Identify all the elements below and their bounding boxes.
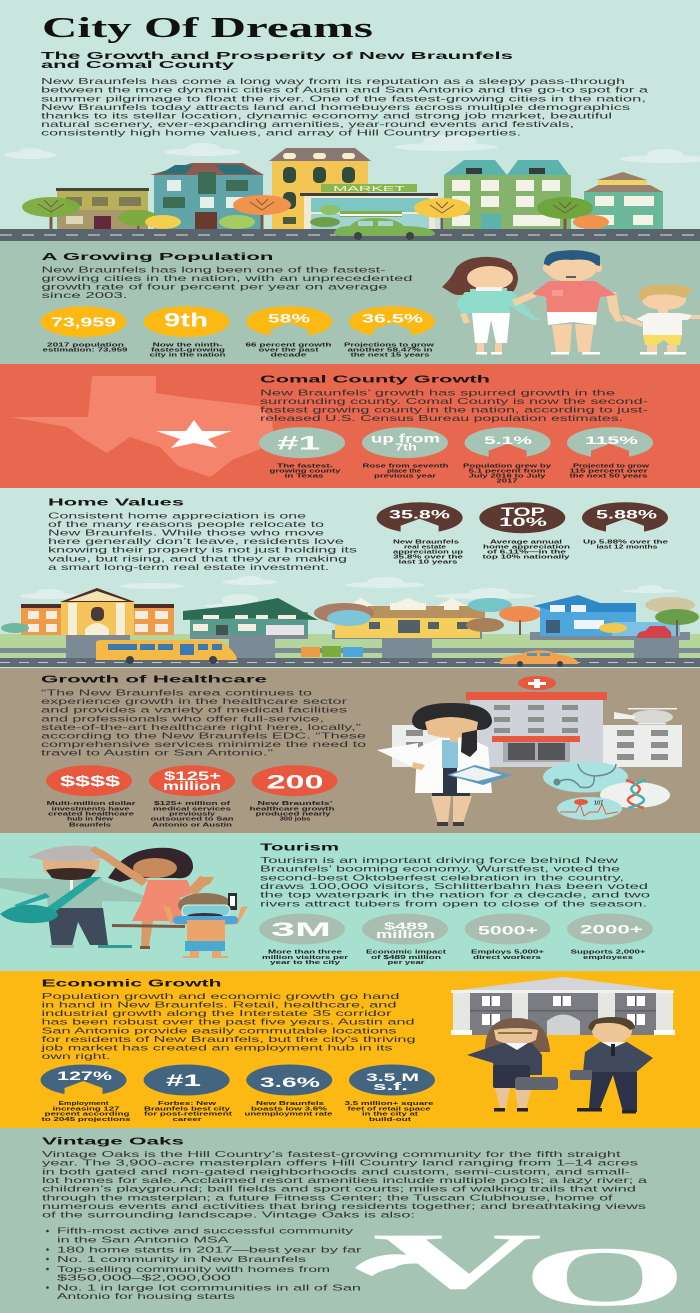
body text: “The New Braunfels area continues to [41, 688, 313, 698]
stat: 58% [246, 306, 332, 359]
body text: growing cities in the nation, with an unprecedented [42, 273, 413, 283]
stat: #1: growing county [270, 469, 341, 475]
body text: through the masterplan; a future Fitness Center; the Tuscan Clubhouse, home of [42, 1192, 614, 1202]
panel: home values [0, 488, 700, 668]
stat: 3.5 M s.f.: build-out [369, 1117, 412, 1123]
bullet list: Top-selling community with homes from [57, 1264, 330, 1274]
stat: 115%: 115 percent over [570, 469, 648, 475]
body text: Tourism is an important driving force behind New [260, 855, 620, 865]
stat: $125+ million: $125+ million of [154, 801, 231, 807]
logo: VO [355, 1217, 687, 1313]
stat: $489 million: of $489 million [371, 955, 441, 961]
stat: 73,959: 2017 population [47, 343, 124, 349]
body text: children’s playground; ball fields and sport courts; miles of walking trails that wind [42, 1184, 637, 1194]
stat: $489 million: Economic impact [366, 950, 447, 956]
stat: 5.1%: 5.1% [484, 435, 532, 447]
stat: 36.5%: 36.5% [362, 312, 424, 326]
body text: in both gated and non-gated neighborhoods and custom, semi-custom, and small- [42, 1166, 630, 1176]
body text: Vintage Oaks is the Hill Country’s fastest-growing community for the fifth straight [42, 1149, 622, 1159]
heading: Economic Growth [42, 978, 222, 990]
intro text block: between the more dynamic cities of Austin and San Antonio and the go-to spot for a [41, 85, 649, 95]
body text: value, but rising, and that they are making [48, 553, 347, 563]
stat: 9th: 9th [164, 310, 208, 332]
stat: $125+ million: previously [169, 811, 215, 817]
stat: up from 7th: previous year [374, 474, 436, 480]
illustration: family [442, 250, 700, 354]
logo: VO: V [372, 1217, 542, 1306]
stat: 5.1%: 5.1 percent from [468, 469, 546, 475]
bullet list: No. 1 community in New Braunfels [57, 1254, 306, 1264]
body text: in hand in New Braunfels. Retail, healthcare, and [42, 999, 397, 1009]
stat: $$$$: Braunfels [69, 822, 111, 828]
stat: top 10%: TOP [501, 507, 546, 519]
icon: star [156, 420, 232, 448]
building: hospital [392, 676, 682, 767]
body text: comprehensive services minimize the need to [41, 739, 367, 749]
body text: a smart long-term real estate investment. [48, 562, 329, 572]
stat: 73,959: 73,959 [51, 314, 116, 330]
body text: San Antonio provide easily commutable locations [42, 1025, 396, 1035]
stat: 3.5 M s.f.: feet of retail space [348, 1106, 431, 1112]
body text: growth rate of four percent per year on average [42, 282, 388, 292]
heading: Growth of Healthcare [41, 674, 268, 686]
clouds [5, 135, 700, 163]
stat: 127%: 127% [57, 1069, 113, 1083]
intro text block: New Braunfels has come a long way from its reputation as a sleepy pass-through [41, 76, 626, 86]
figure: child with goggles [163, 893, 248, 958]
intro text block: thanks to its stellar location, dynamic economy and strong job market, beautiful [41, 110, 612, 120]
body text: New Braunfels has long been one of the fastest- [42, 264, 386, 274]
stat: 36.5%: another 58.47% in [348, 348, 432, 354]
building: market [300, 184, 438, 230]
stat: 35.8%: 35.8% [389, 508, 451, 522]
figure: doctor [377, 703, 512, 826]
grass and side street [0, 630, 700, 658]
stat: $125+ million: outsourced to San [150, 817, 234, 823]
body text [42, 1149, 648, 1220]
stat: $489 million: $489 [384, 920, 428, 932]
stat: top 10%: home appreciation [483, 544, 570, 550]
stat: 3.5 M s.f. [344, 1064, 435, 1123]
bullet list: in the San Antonio MSA [57, 1234, 229, 1244]
heading: A Growing Population [42, 252, 274, 263]
stat: 115%: the next 50 years [570, 474, 648, 480]
stat: top 10%: Average annual [490, 539, 563, 545]
stat: 36.5% [344, 306, 436, 359]
body text: second-best Oktoberfest celebration in the country, [260, 872, 624, 882]
stat: 35.8%: real estate [404, 544, 446, 550]
stat: 58%: over the past [258, 348, 319, 354]
bullet list: Antonio for housing starts [57, 1291, 235, 1301]
illustration: town street with market [0, 148, 700, 241]
house: orange school [1, 588, 174, 635]
stat: 5000+: direct workers [473, 955, 541, 961]
body text: experience growth in the healthcare sector [41, 696, 347, 706]
stat: #1: The fastest- [277, 464, 334, 470]
stat: #1: in Texas [284, 474, 324, 480]
stat: top 10%: 10% [499, 517, 547, 529]
stat: #1 Forbes: #1 [166, 1071, 201, 1090]
heading: Vintage Oaks [42, 1136, 185, 1148]
stat: 35.8%: New Braunfels [393, 539, 459, 545]
vehicle: orange car [500, 650, 578, 667]
house: blue [533, 595, 699, 638]
intro text block: summer pilgrimage to float the river. One of the fastest-growing cities in the nation, [41, 93, 646, 103]
stat: 115%: 115% [585, 435, 638, 447]
stat: 35.8% [377, 502, 463, 566]
subtitle: The Growth and Prosperity of New Braunfels [41, 51, 514, 62]
stat: up from 7th [362, 427, 448, 480]
illustration: hospital and doctor [377, 676, 682, 826]
stat: 3M: million visitors per [262, 955, 348, 961]
stat: $$$$: Multi-million dollar [46, 801, 136, 807]
stat: 127%: percent according [44, 1112, 130, 1118]
body text: released U.S. Census Bureau population estimates. [260, 413, 623, 423]
stat: 3.5 M s.f.: 3.5 M [366, 1072, 419, 1084]
bullet list: No. 1 in large lot communities in all of San [57, 1282, 362, 1292]
figure: child [622, 285, 700, 354]
building: columned office [451, 977, 675, 1035]
stat: 3.6%: 3.6% [260, 1074, 321, 1090]
building: olive shop [56, 188, 149, 230]
stat: 3M: 3M [271, 920, 331, 941]
heading: Tourism [260, 842, 339, 854]
title: City Of Dreams [42, 12, 373, 44]
body text: of the surrounding landscape. Vintage Oaks is also: [42, 1210, 415, 1220]
stat: 127%: Employment [58, 1101, 109, 1107]
stat: 5.88%: Up 5.88% over the [583, 539, 668, 545]
heading: Home Values [48, 498, 185, 508]
stat: 200: healthcare growth [250, 806, 334, 812]
vehicle: school bus [96, 640, 237, 664]
figure: woman [442, 257, 540, 354]
stat: 9th: city in the nation [150, 353, 226, 359]
panel: intro header and town street [0, 0, 700, 241]
body text: fastest growing county in the nation, according to just- [260, 405, 648, 415]
stat: top 10%: of 6.11%—in the [487, 549, 566, 555]
stat: 3.6%: unemployment rate [244, 1112, 333, 1118]
body text: rivers attract tubers from open to close of the season. [260, 898, 647, 908]
body text [41, 688, 367, 757]
stat: 5000+: Employs 5,000+ [471, 950, 544, 956]
stat: 3.6% [244, 1064, 333, 1118]
body text: job market has created an employment hub in its [40, 1043, 393, 1053]
icon: heart rate circle [557, 797, 622, 820]
stat: 58%: decade [270, 353, 307, 359]
stat: top 10%: top 10% nationally [482, 554, 570, 560]
intro text block: natural scenery, ever-expanding amenities, year-round events and festivals, [41, 119, 574, 129]
intro text block: New Braunfels today attracts land and homebuyers across multiple demographics [41, 102, 630, 112]
stat: $489 million: per year [388, 960, 424, 966]
body text [48, 510, 357, 572]
figure: man [512, 250, 624, 354]
icon: stethoscope circle [543, 762, 628, 792]
stat: $489 million: million [376, 929, 435, 941]
stat: 115% [567, 427, 653, 480]
stat: 35.8%: appreciation up [393, 549, 463, 555]
stat: #1 Forbes [144, 1064, 233, 1123]
body text: surrounding county. Comal County is now the second- [260, 396, 648, 406]
body text: since 2003. [42, 290, 128, 300]
stat: 3.6%: boasts low 3.6% [251, 1106, 328, 1112]
icon: helicopter [614, 708, 677, 724]
subtitle: and Comal County [41, 60, 235, 71]
road [0, 229, 700, 241]
stat: $$$$ [46, 765, 136, 828]
stat: 9th [144, 306, 230, 359]
stat: up from 7th: up from [371, 432, 440, 446]
stat: 3.5 M s.f.: s.f. [373, 1081, 408, 1093]
icon: dna circle [600, 780, 670, 808]
panel: a growing population [0, 241, 700, 364]
stat: 5.88%: 5.88% [596, 508, 658, 522]
body text [260, 388, 648, 423]
stat: 127%: increasing 127 [52, 1106, 120, 1112]
stat: #1 Forbes: for post-retirement [144, 1112, 233, 1118]
stat: 9th: Now the ninth- [152, 343, 223, 349]
house: green [183, 598, 318, 635]
stat: 3M: More than three [268, 950, 342, 956]
car: green [334, 218, 435, 240]
stat: $125+ million: $125+ [164, 771, 221, 783]
body text: has been robust over the past five years. Austin and [42, 1017, 415, 1027]
body text: New Braunfels. While those who move [48, 528, 325, 538]
stat: $125+ million [149, 765, 235, 828]
stat: 200: produced nearly [256, 811, 331, 817]
stat: 3.5 M s.f.: in the city at [362, 1112, 418, 1118]
stat: top 10% [479, 502, 570, 560]
stat: 73,959: estimation: 73,959 [42, 348, 128, 354]
subtitle [41, 51, 514, 71]
stat: 5.1%: 2017 [496, 479, 518, 485]
stat: 2000+: 2000+ [580, 922, 643, 936]
body text [40, 991, 416, 1061]
bullet list [46, 1226, 362, 1301]
stat: 2000+: Supports 2,000+ [570, 950, 646, 956]
figure: woman [90, 846, 214, 949]
illustration: tourist family [0, 846, 248, 958]
illustration: neighborhood street [0, 576, 700, 667]
body text: own right. [42, 1051, 110, 1061]
stat: 5.1%: Population grew by [463, 464, 551, 470]
stat: 200: New Braunfels’ [258, 801, 334, 807]
bullet list: $350,000–$2,000,000 [57, 1273, 232, 1283]
stat: $489 million [362, 914, 448, 966]
intro text block [41, 76, 649, 138]
body text: and professionals who offer full-service, [41, 713, 324, 723]
body text: and provides a variety of medical facilities [41, 705, 347, 715]
stat: $125+ million: medical services [153, 806, 231, 812]
stat: $$$$: investments have [52, 806, 130, 812]
stat: 3.5 M s.f.: 3.5 million+ square [344, 1101, 434, 1107]
stat: #1: #1 [277, 434, 321, 454]
body text: state-of-the-art healthcare right here, locally,” [41, 722, 361, 732]
body text: Population growth and economic growth go hand [42, 991, 400, 1001]
stat: $125+ million: Antonio or Austin [152, 822, 232, 828]
road [0, 658, 700, 667]
stat: 2000+ [567, 914, 653, 961]
stat: 5.1%: July 2016 to July [468, 474, 546, 480]
icon: heart rate circle: 107 [594, 800, 603, 806]
stat: 73,959 [40, 306, 128, 354]
body text: numerous events and activities that bring residents together; and breathtaking views [42, 1201, 646, 1211]
intro text block: consistently high home values, and array of Hill Country properties. [41, 128, 521, 138]
stat: 5.1% [463, 427, 551, 485]
building: market: MARKET [333, 184, 406, 193]
body text: the top waterpark in the nation for a decade, and two [260, 890, 651, 900]
stat: 3M [259, 914, 348, 966]
stat: 58%: 58% [268, 312, 311, 326]
body text: lot homes for sale. Acclaimed resort amenities include multiple pools; a lazy river; a [42, 1175, 648, 1185]
panel: vintage oaks [0, 1128, 700, 1313]
body text: knowing their property is not just holding its [48, 545, 357, 555]
body text: year. The 3,900-acre masterplan offers Hill Country land ranging from 1–14 acres [42, 1158, 638, 1168]
heading: Comal County Growth [260, 374, 490, 386]
icon: recycling bins [301, 646, 363, 657]
stat: 3M: year to the city [270, 960, 340, 966]
stat: #1 Forbes: Braunfels best city [144, 1106, 230, 1112]
body text: here generally don’t leave, residents love [48, 536, 345, 546]
building: green apartments [444, 160, 571, 230]
stat: 5.88%: last 12 months [596, 544, 658, 550]
stat: $$$$: hub in New [67, 817, 115, 823]
body text: Consistent home appreciation is one [48, 510, 307, 520]
stat: 5000+: 5000+ [478, 924, 538, 938]
stat: 58%: 66 percent growth [246, 343, 332, 349]
stat: 35.8%: last 10 years [398, 560, 458, 566]
building: teal with solar roof [150, 163, 264, 230]
stat: 127% [40, 1064, 131, 1123]
stat: 127%: to 2045 projections [42, 1117, 131, 1123]
figure: businessman [570, 1017, 653, 1114]
bullet list: Fifth-most active and successful community [57, 1226, 354, 1236]
stat: 2000+: employees [583, 955, 633, 961]
stat: 36.5%: the next 15 years [350, 353, 430, 359]
panel: comal county growth [0, 364, 700, 488]
stat: #1 [259, 427, 345, 480]
stat: up from 7th: place the [387, 469, 421, 475]
body text: draws 100,000 visitors, Schlitterbahn has been voted [260, 881, 649, 891]
panel: economic growth [0, 971, 700, 1128]
stat: $$$$: created healthcare [48, 811, 134, 817]
building: yellow tower [269, 148, 371, 230]
stat: 36.5%: Projections to grow [344, 343, 436, 349]
stat: 200 [250, 765, 338, 823]
stat: 115%: Projected to grow [573, 464, 651, 470]
stat: $125+ million: million [163, 781, 221, 793]
stat: $$$$: $$$$ [60, 773, 121, 790]
body text: New Braunfels’ growth has spurred growth in the [260, 388, 616, 398]
stat: 5.88% [582, 502, 668, 550]
stat: 200: 200 [266, 772, 324, 794]
house: yellow craftsman [314, 598, 541, 638]
body text: industrial growth along the Interstate 35 corridor [42, 1008, 392, 1018]
stat: 3.6%: New Braunfels [256, 1101, 324, 1107]
panel: growth of healthcare [0, 668, 700, 833]
body text [260, 855, 651, 908]
building: small green house [584, 172, 663, 230]
figure: businesswoman [467, 1018, 558, 1112]
panel: tourism [0, 833, 700, 971]
figure: man with bag [0, 846, 148, 948]
stat: up from 7th: 7th [395, 442, 417, 454]
stat: 35.8%: 35.8% over the [393, 554, 463, 560]
body text: for residents of New Braunfels, but the city’s thriving [42, 1034, 416, 1044]
stat: up from 7th: Rose from seventh [362, 464, 448, 470]
stat: #1 Forbes: Forbes: New [158, 1101, 218, 1107]
body text: according to the New Braunfels EDC. “These [41, 730, 367, 740]
stat: 9th: fastest-growing [151, 348, 225, 354]
stat: 5000+ [465, 914, 551, 961]
body text: of the many reasons people relocate to [48, 519, 325, 529]
bullet list: 180 home starts in 2017—best year by far [57, 1244, 362, 1254]
trees [22, 195, 609, 230]
stat: 200: 300 jobs [280, 817, 311, 823]
body text [42, 264, 413, 300]
illustration: office building and professionals [451, 977, 675, 1114]
stat: #1 Forbes: career [172, 1117, 202, 1123]
body text: travel to Austin or San Antonio.” [41, 747, 273, 757]
map: Texas [10, 376, 274, 477]
body text: Braunfels’ booming economy. Wurstfest, voted the [260, 864, 621, 874]
